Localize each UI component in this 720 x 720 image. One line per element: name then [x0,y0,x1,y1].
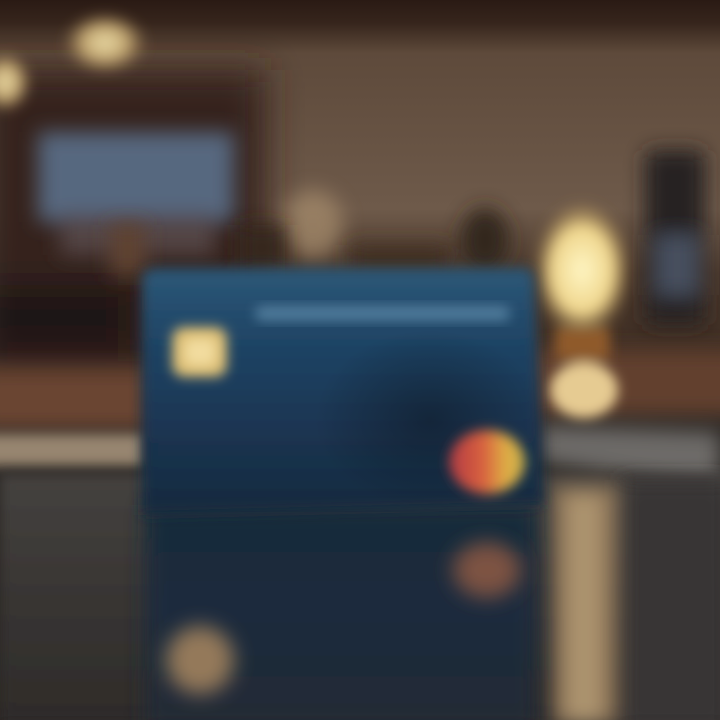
chip highlight [184,338,216,366]
ceiling lamps [0,11,149,114]
panel: credit card [142,268,545,515]
pale table edge [0,434,145,466]
silhouette: background figures [110,208,509,275]
dark device on the right [645,150,705,325]
bright lamp on the right [532,200,632,418]
logo reflection [453,542,521,598]
wooden band [0,368,150,430]
chip [172,327,227,377]
card body [142,268,544,515]
card reflection [145,505,537,720]
background: wall [0,0,720,380]
orb: background light [283,190,343,258]
window: blue blurred panel [38,132,234,255]
table surface [0,474,720,720]
card right shading [315,330,545,510]
card logo [449,430,525,494]
lamp reflection column [552,485,618,720]
background: dark left side [0,70,265,370]
chip reflection [166,626,234,694]
card top highlight text band [255,306,510,321]
